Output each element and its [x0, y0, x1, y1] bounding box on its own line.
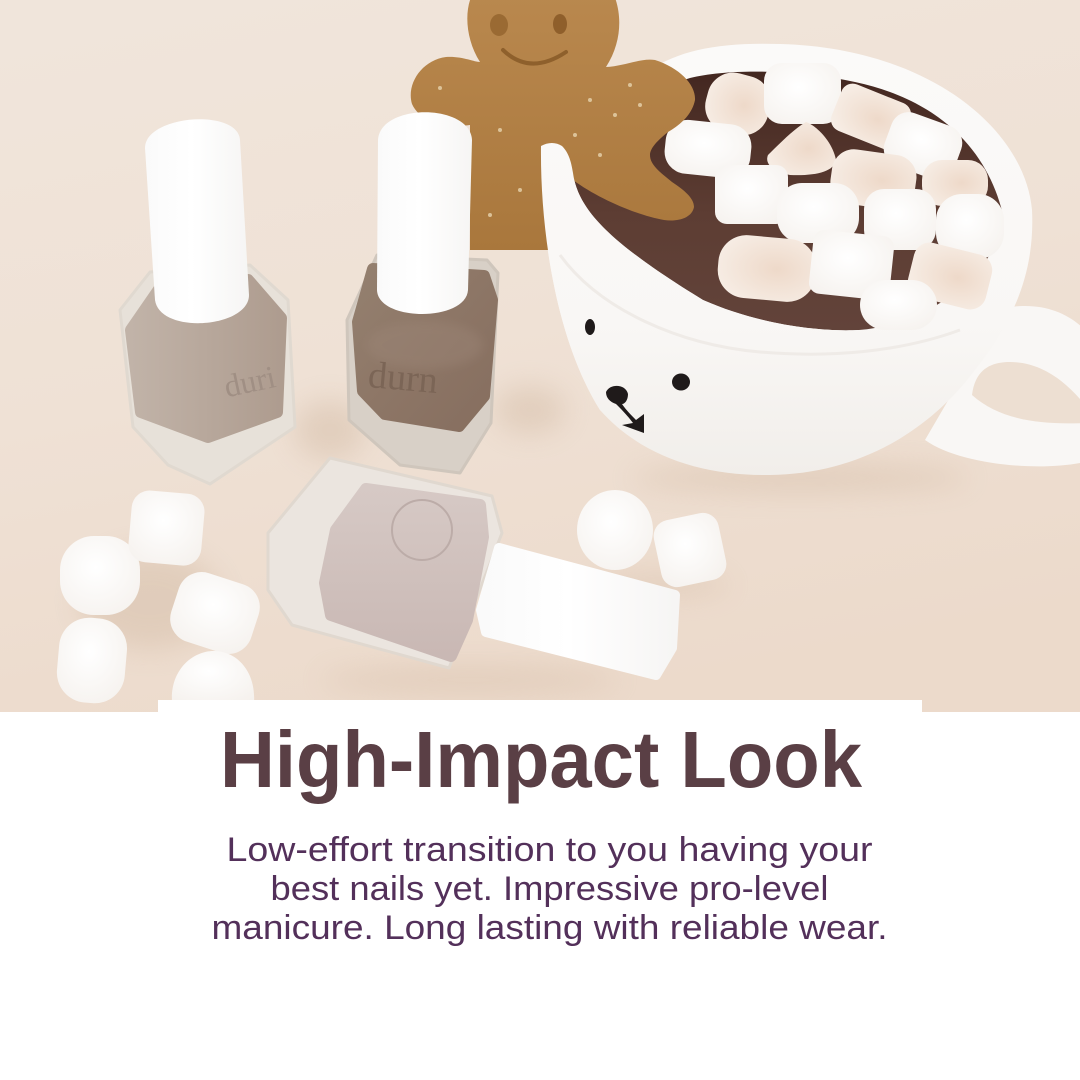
cookie eye right — [553, 14, 567, 34]
body text — [212, 831, 888, 947]
mug body — [541, 44, 1032, 475]
photo background — [0, 0, 1080, 712]
cookie smile — [503, 50, 566, 64]
bear eye right — [672, 374, 690, 390]
cookie eye left — [490, 14, 508, 36]
body text: manicure. Long lasting with reliable wear. — [212, 909, 888, 947]
bear eye left — [585, 319, 595, 335]
polish bottle middle — [347, 112, 498, 473]
cookie sugar speckles — [438, 83, 642, 217]
rim shading line — [560, 255, 960, 354]
title: High-Impact Look — [220, 715, 862, 804]
cocoa — [573, 72, 1002, 330]
gingerbread cookie — [411, 0, 695, 250]
loose marshmallows — [54, 489, 729, 706]
white title band — [0, 700, 1080, 1080]
polish bottle middle: durn — [367, 354, 440, 402]
body text: best nails yet. Impressive pro-level — [270, 870, 828, 908]
polish bottle left: duri — [221, 358, 279, 404]
polish bottle left — [120, 119, 295, 484]
polish bottle lying down — [268, 458, 675, 675]
mug handle — [925, 306, 1080, 466]
body text: Low-effort transition to you having your — [226, 831, 872, 869]
soft shadows — [80, 386, 970, 692]
bear nose and mouth — [606, 386, 644, 433]
mug front rim over cookie — [541, 143, 859, 440]
marshmallows in cocoa — [662, 63, 1004, 330]
